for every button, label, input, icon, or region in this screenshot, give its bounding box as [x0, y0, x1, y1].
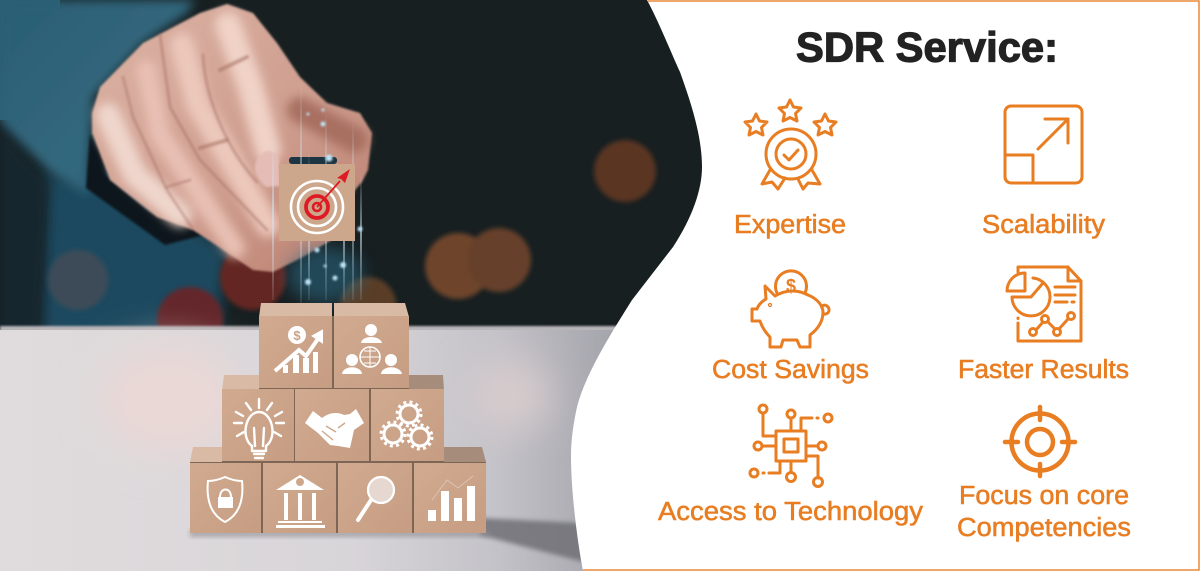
- photo background: [0, 0, 720, 571]
- hand: [92, 4, 372, 272]
- icon: bank building: [276, 475, 325, 528]
- icon: piggy bank: [752, 271, 829, 347]
- label: access to technology: Access to Technology: [658, 498, 923, 526]
- icon: scale arrow: [1005, 106, 1082, 183]
- label: focus on core competencies: [957, 482, 1131, 542]
- label: faster results: Faster Results: [958, 356, 1129, 384]
- fingernail: [255, 151, 280, 187]
- block faces: [190, 316, 486, 533]
- icon: growth chart with dollar: $: [293, 328, 301, 343]
- label: expertise: Expertise: [734, 211, 846, 239]
- left base tone: [0, 0, 60, 120]
- icon: gears: [381, 402, 432, 449]
- icon: circuit chip: [750, 405, 832, 486]
- icon: award with stars: [745, 100, 836, 189]
- item: expertise: [734, 100, 846, 239]
- block top faces: [190, 303, 409, 462]
- dark cuff: [86, 135, 215, 245]
- sleeve: [0, 0, 195, 195]
- item: cost savings: [712, 271, 869, 384]
- label: cost savings: Cost Savings: [712, 356, 869, 384]
- item: faster results: [958, 267, 1129, 384]
- sparkles: [305, 108, 362, 285]
- label: scalability: Scalability: [982, 211, 1105, 239]
- item: scalability: [982, 106, 1105, 239]
- icon: handshake: [305, 409, 364, 448]
- target block with light beams: [272, 80, 363, 305]
- finger creases: [123, 35, 267, 230]
- wooden block pyramid: [190, 303, 486, 533]
- title: SDR Service:: [796, 24, 1058, 70]
- icon: crosshair target: [1005, 407, 1075, 476]
- icon: magnifying glass: [358, 477, 394, 520]
- target icon: [291, 169, 350, 233]
- white content panel: [571, 0, 1200, 571]
- icon: report with pie chart: [1007, 267, 1081, 341]
- panel border: [583, 1, 1199, 570]
- table surface: [0, 330, 640, 571]
- block gaps backing: [190, 316, 486, 533]
- left dark fold: [0, 128, 50, 340]
- icon: light bulb: [234, 399, 284, 458]
- light beams: [272, 80, 362, 305]
- icon: security shield: [208, 477, 242, 522]
- table edge haze: [0, 326, 640, 332]
- icon: growth chart with dollar: [275, 326, 322, 373]
- finger highlights: [108, 25, 355, 248]
- lower teal jacket: [40, 175, 230, 340]
- target block face: [279, 164, 355, 241]
- icon: piggy bank: $: [786, 276, 796, 296]
- blue glow: [287, 247, 363, 303]
- item: access to technology: [658, 405, 923, 526]
- icon: people and globe: [342, 324, 402, 374]
- item: focus on core competencies: [957, 407, 1131, 542]
- label: focus on core competencies: Focus on core: [959, 482, 1129, 510]
- block shadow: [480, 518, 600, 566]
- bokeh lights: [48, 140, 656, 353]
- label: focus on core competencies: Competencies: [957, 514, 1131, 542]
- icon: bar chart: [428, 476, 475, 521]
